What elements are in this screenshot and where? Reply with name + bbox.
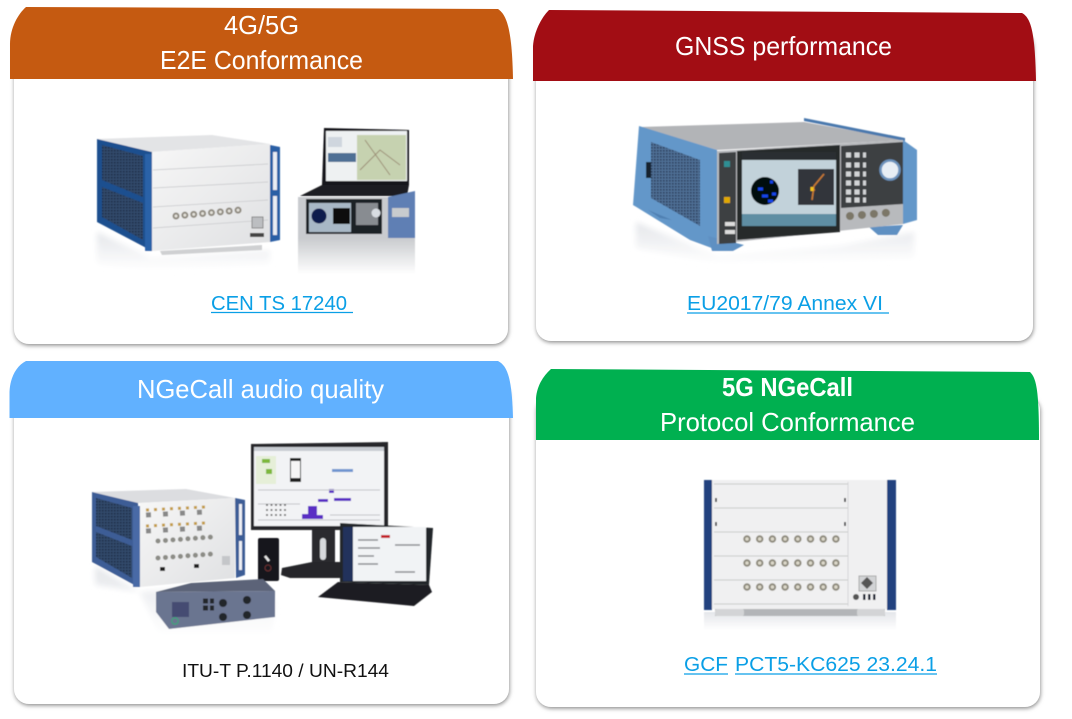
heading: E2E Conformance	[160, 45, 363, 75]
header band	[533, 10, 1036, 81]
heading: 5G NGeCall	[722, 372, 853, 402]
header band	[10, 7, 513, 79]
product image: 5G protocol test rack	[704, 480, 896, 630]
product image: radio test rack and GNSS simulator with laptop	[97, 128, 415, 274]
standard link: EU2017/79 Annex VI	[687, 293, 883, 315]
standard links: PCT5-KC625 23.24.1	[735, 654, 937, 676]
card background	[14, 380, 509, 704]
panel: NGeCall audio quality	[10, 361, 513, 704]
standard links: GCF	[684, 654, 728, 676]
standard link: CEN TS 17240	[211, 293, 347, 315]
panel: GNSS performance	[533, 10, 1036, 341]
heading: NGeCall audio quality	[137, 374, 384, 404]
card background	[536, 395, 1040, 707]
heading: 4G/5G	[224, 10, 299, 40]
card background	[536, 30, 1033, 341]
header band	[10, 361, 513, 418]
product image: GNSS simulator	[633, 118, 917, 264]
panel: 4G/5G E2E Conformance	[10, 7, 513, 344]
heading: GNSS performance	[675, 31, 892, 61]
card background	[14, 30, 508, 344]
product image: audio test setup	[92, 442, 433, 636]
standard reference text: ITU-T P.1140 / UN-R144	[182, 660, 389, 681]
panel: 5G NGeCall Protocol Conformance	[536, 369, 1040, 707]
heading: Protocol Conformance	[660, 407, 915, 437]
header band	[536, 369, 1039, 440]
